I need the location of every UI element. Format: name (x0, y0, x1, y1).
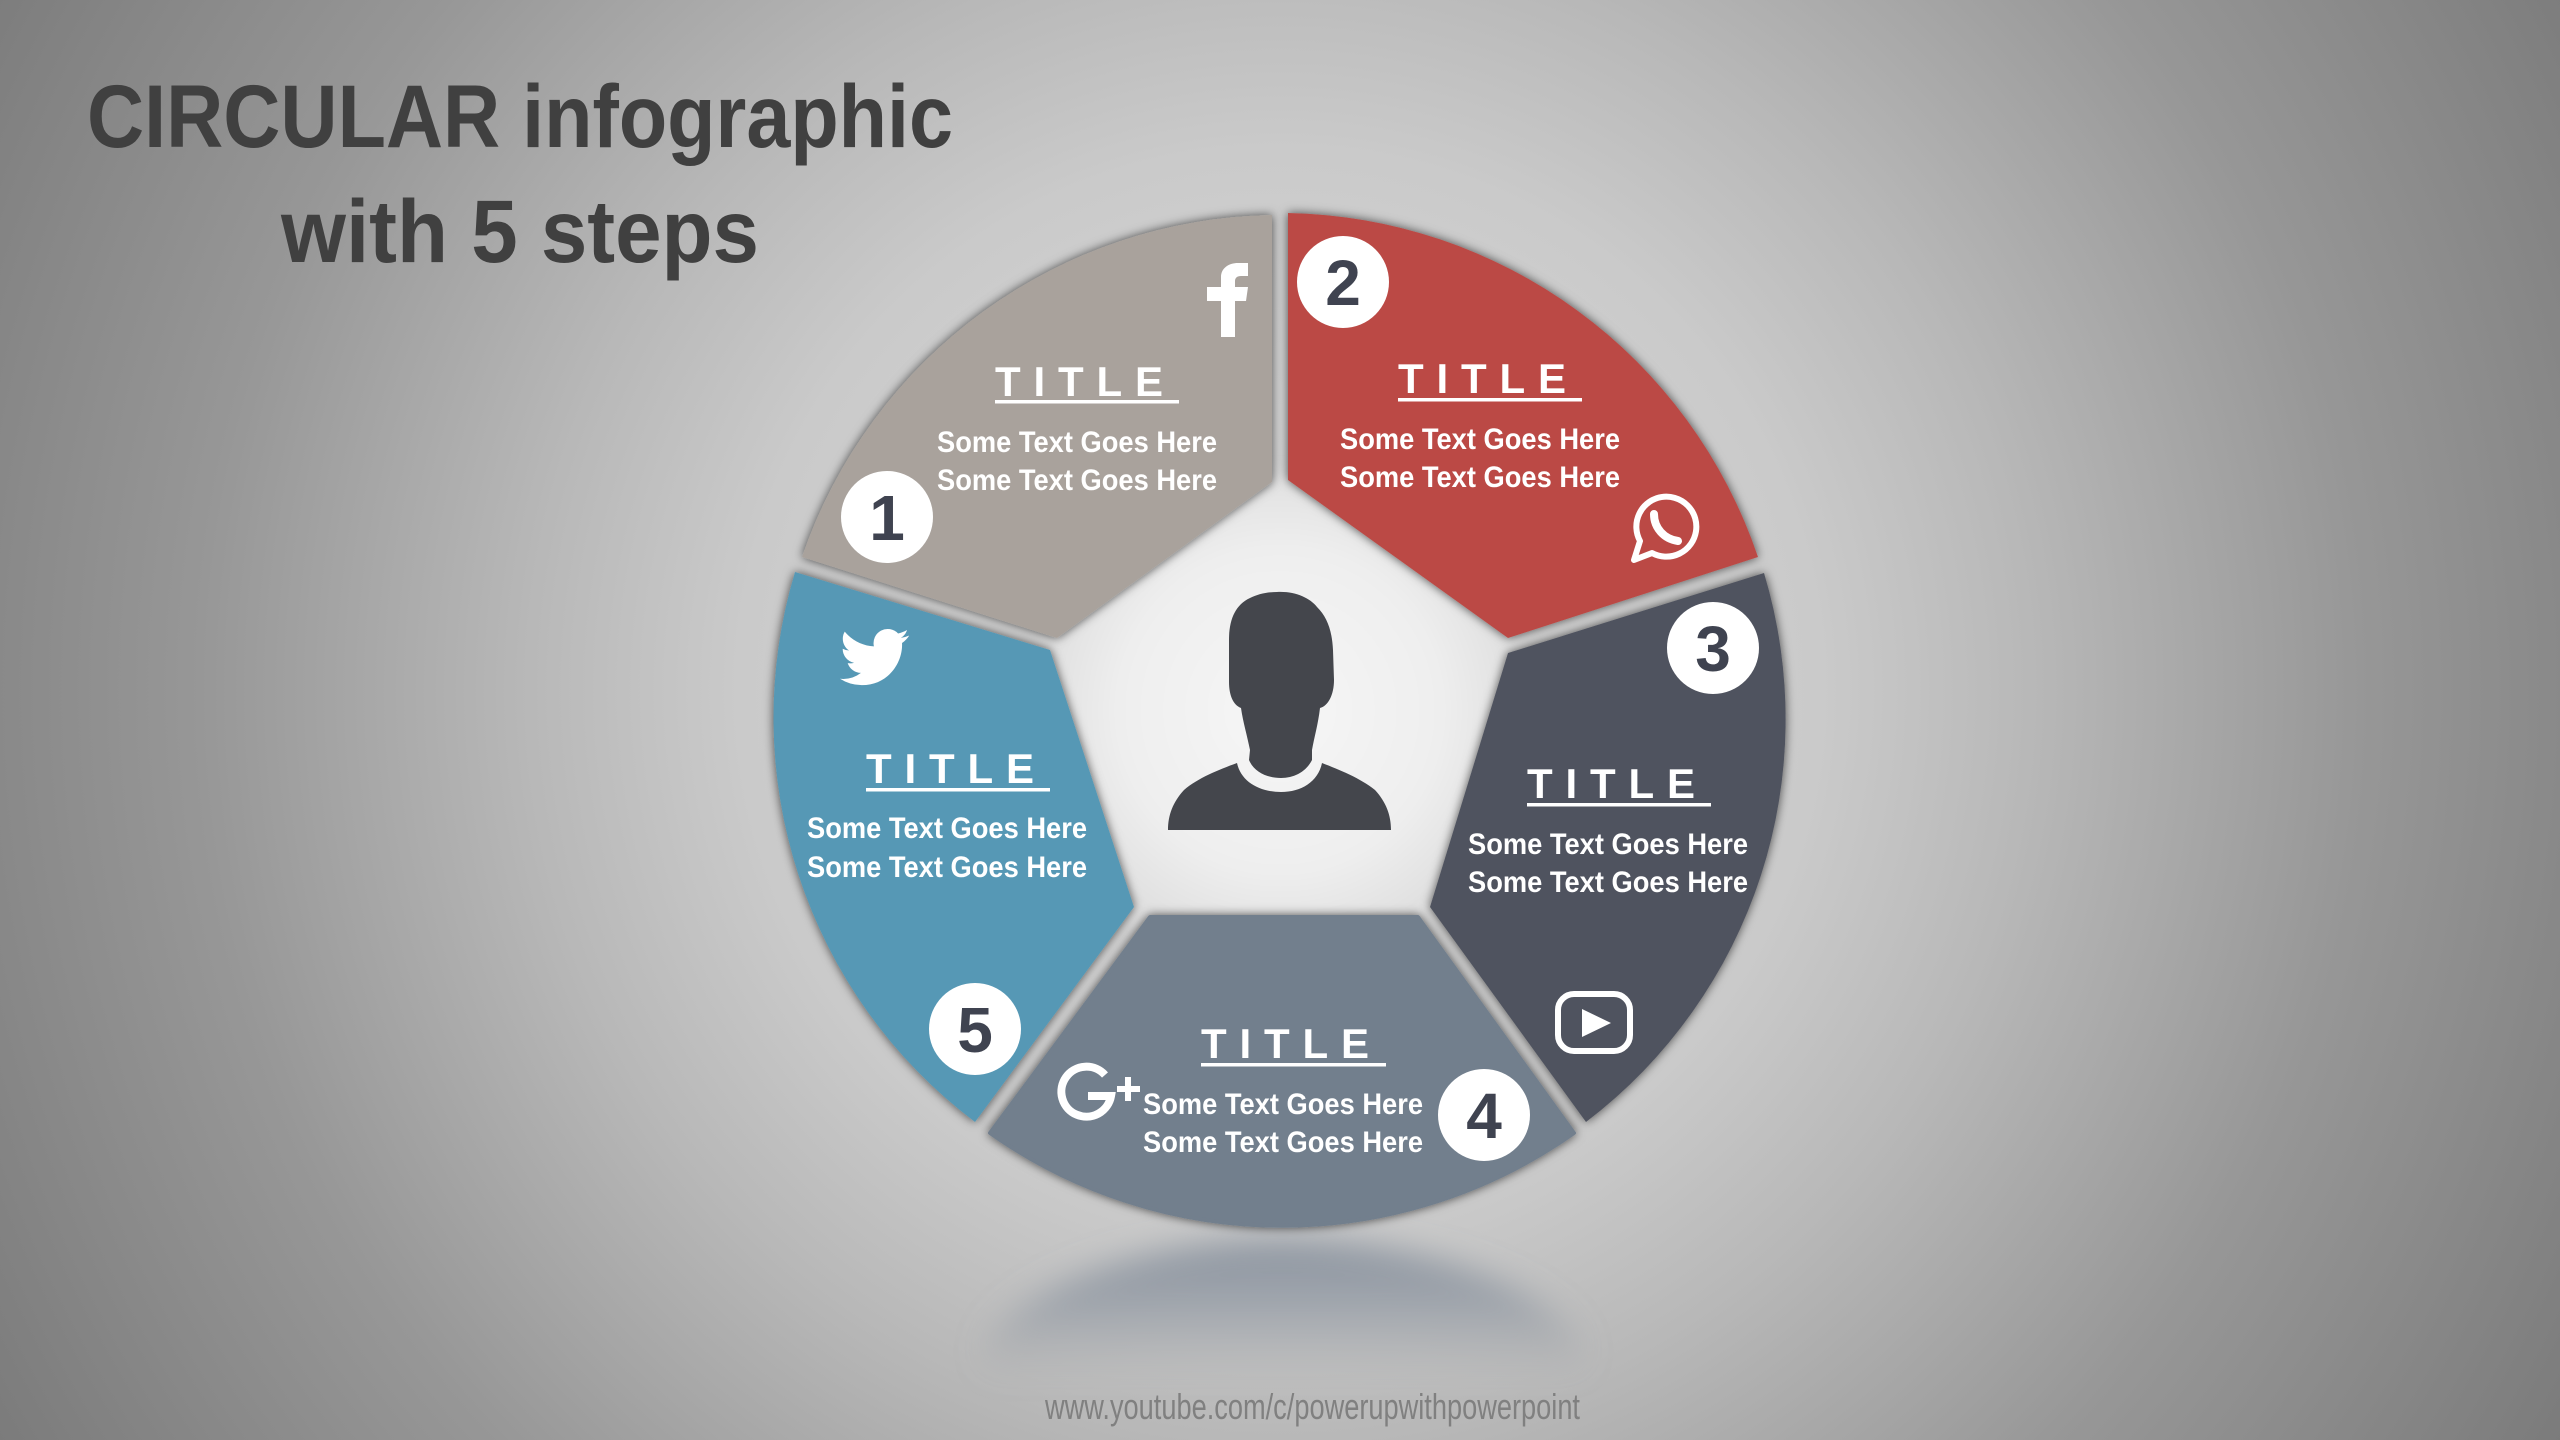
heading 4: TITLE (1201, 1020, 1369, 1067)
icon: whatsapp (1634, 497, 1696, 560)
text block 4: Some Text Goes Here (1143, 1088, 1423, 1121)
segment shape 1 (802, 215, 1272, 638)
heading 2: TITLE (1398, 355, 1566, 402)
number badge 5 (929, 983, 1021, 1075)
text block 2 (1340, 423, 1620, 494)
panel: step 1 (802, 215, 1272, 638)
text block 1 (937, 426, 1217, 497)
segment shape 5 (774, 572, 1134, 1122)
text block 3: Some Text Goes Here (1468, 828, 1748, 861)
segment shape 3 (1430, 573, 1786, 1122)
number badge 3: 3 (1695, 613, 1731, 685)
panel: step 3 (1430, 573, 1786, 1122)
icon: twitter (840, 629, 909, 685)
text block 5: Some Text Goes Here (807, 851, 1087, 884)
icon: person silhouette (1168, 592, 1391, 830)
number badge 4: 4 (1466, 1080, 1502, 1152)
number badge 3 (1667, 602, 1759, 694)
text block 5 (807, 812, 1087, 884)
heading 5: TITLE (866, 745, 1034, 792)
number badge 4 (1438, 1069, 1530, 1161)
number badge 2 (1297, 236, 1389, 328)
title: CIRCULAR infographic (87, 66, 953, 166)
center pentagon glow (1030, 470, 1530, 925)
text block 4 (1143, 1088, 1423, 1159)
text block 5: Some Text Goes Here (807, 812, 1087, 845)
panel: step 2 (1288, 213, 1758, 638)
icon: google plus (1061, 1067, 1140, 1117)
number badge 1: 1 (869, 482, 905, 554)
text block 1: Some Text Goes Here (937, 426, 1217, 459)
segment shape 2 (1288, 213, 1758, 638)
title: with 5 steps (280, 181, 759, 281)
text block 4: Some Text Goes Here (1143, 1126, 1423, 1159)
reflection under the circle (985, 1240, 1582, 1376)
icon: youtube (1558, 994, 1630, 1051)
heading 1: TITLE (995, 358, 1163, 405)
text block 2: Some Text Goes Here (1340, 423, 1620, 456)
number badge 1 (841, 471, 933, 563)
segment shape 4 (990, 917, 1574, 1226)
text block 3 (1468, 828, 1748, 899)
icon: facebook (1207, 263, 1248, 337)
text block 2: Some Text Goes Here (1340, 461, 1620, 494)
panel: step 4 (990, 917, 1574, 1226)
panel: step 5 (774, 572, 1134, 1122)
text block 3: Some Text Goes Here (1468, 866, 1748, 899)
number badge 5: 5 (957, 994, 993, 1066)
title (87, 66, 953, 281)
footer url: www.youtube.com/c/powerupwithpowerpoint (1044, 1386, 1580, 1427)
number badge 2: 2 (1325, 247, 1361, 319)
heading 3: TITLE (1527, 760, 1695, 807)
text block 1: Some Text Goes Here (937, 464, 1217, 497)
